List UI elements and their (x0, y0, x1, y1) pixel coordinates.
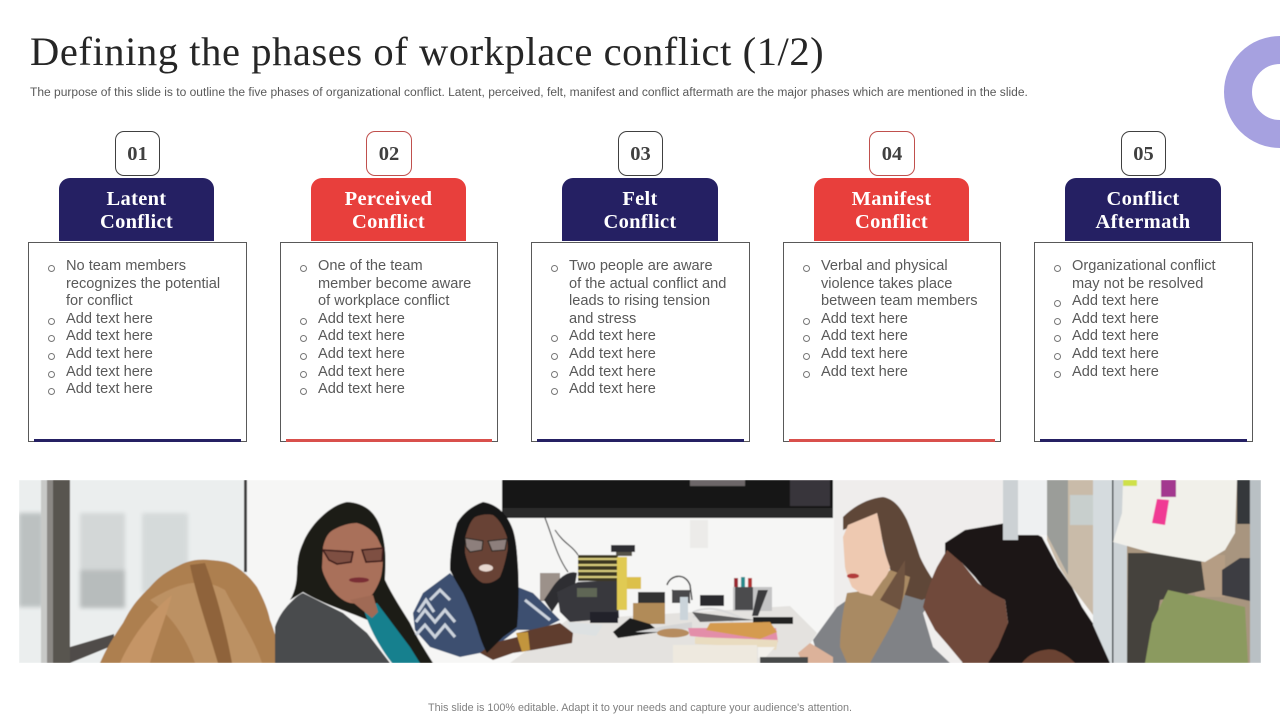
bullet list: manifest: Add text here (821, 311, 908, 327)
woman 5 face (923, 550, 1008, 663)
wall (246, 480, 1092, 663)
bullet list: felt: Two people are aware (569, 258, 713, 274)
bullet list: latent: for conflict (66, 293, 133, 309)
bullet list: aftermath: Add text here (1072, 364, 1159, 380)
bullet list: felt: Add text here (569, 381, 656, 397)
bullet list: manifest: Verbal and physical (821, 258, 948, 274)
bullet list: felt (551, 258, 726, 397)
woman 3 neck (478, 578, 496, 608)
bullet list: felt: and stress (569, 311, 636, 327)
bullet list: felt: leads to rising tension (569, 293, 710, 309)
woman 3 glasses (465, 538, 507, 552)
woman 2 glasses (323, 548, 383, 564)
bullet list: perceived: member become aware (318, 276, 471, 292)
bullet list: aftermath: Organizational conflict (1072, 258, 1216, 274)
woman 2 lips (349, 577, 369, 583)
bullet list: aftermath: Add text here (1072, 311, 1159, 327)
header: Latent Conflict (59, 178, 214, 241)
header: Conflict Aftermath (1065, 178, 1221, 241)
bullet list: manifest: Add text here (821, 364, 908, 380)
header: Felt Conflict: Felt (622, 188, 658, 210)
bullet list: perceived: Add text here (318, 328, 405, 344)
header: Conflict Aftermath: Conflict (1106, 188, 1180, 210)
header: Felt Conflict: Conflict (604, 211, 676, 233)
bullet list: perceived: Add text here (318, 311, 405, 327)
bullet list: perceived: Add text here (318, 381, 405, 397)
number badge 02: 02 (379, 143, 399, 165)
woman 5 shoulder (1022, 650, 1075, 663)
number badge 01 (115, 131, 160, 176)
desk phone and gear (540, 573, 560, 601)
window left (19, 480, 247, 663)
subtitle description: The purpose of this slide is to outline the five phases of organizational conflict. Latent, perceived, felt, manifest and conflict aftermath are the major phases which are mentioned in the slide. (30, 85, 1028, 99)
accent bar: navy (1040, 439, 1247, 442)
header: Manifest Conflict: Conflict (855, 211, 928, 233)
bullet list: manifest: between team members (821, 293, 978, 309)
woman 4 jacket (813, 590, 950, 663)
woman 4 face (843, 513, 890, 596)
woman 1 back of head (100, 560, 282, 663)
green chair (1145, 590, 1248, 663)
bullet list: aftermath: Add text here (1072, 328, 1159, 344)
bullet list: felt: Add text here (569, 346, 656, 362)
bullet list: perceived: One of the team (318, 258, 423, 274)
panel: Latent Conflict (28, 242, 247, 442)
bullet list: felt: Add text here (569, 328, 656, 344)
header: Latent Conflict: Latent (107, 188, 166, 210)
number badge 02 (366, 131, 412, 176)
books (688, 628, 778, 642)
photo illustration: five women in a meeting (19, 480, 1261, 663)
bullet list: aftermath (1054, 258, 1216, 380)
bullet list: manifest (803, 258, 978, 380)
footer note: This slide is 100% editable. Adapt it to your needs and capture your audience's attention. (428, 702, 852, 714)
bullet list: aftermath: Add text here (1072, 293, 1159, 309)
woman 4 hand (798, 643, 833, 663)
accent bar: red (789, 439, 995, 442)
woman 2 face (322, 523, 383, 604)
bullet list: latent (48, 258, 220, 397)
bullet list: latent: Add text here (66, 328, 153, 344)
header: Manifest Conflict (814, 178, 969, 241)
woman 3 hair (450, 502, 519, 653)
bullet list: latent: Add text here (66, 364, 153, 380)
header: Felt Conflict (562, 178, 718, 241)
header: Perceived Conflict: Conflict (352, 211, 425, 233)
header: Manifest Conflict: Manifest (852, 188, 931, 210)
panel: Felt Conflict (531, 242, 750, 442)
right glass panels (1003, 480, 1018, 540)
accent bar: red (286, 439, 492, 442)
number badge 03: 03 (630, 143, 651, 165)
bullet list: latent: Add text here (66, 346, 153, 362)
header: Conflict Aftermath: Aftermath (1096, 211, 1190, 233)
header: Latent Conflict: Conflict (100, 211, 173, 233)
woman 4 hair (843, 497, 937, 600)
bullet list: felt: of the actual conflict and (569, 276, 726, 292)
paper with sticky notes (1113, 480, 1237, 562)
bullet list: latent: recognizes the potential (66, 276, 220, 292)
bullet list: latent: Add text here (66, 381, 153, 397)
woman 4 lips (847, 574, 859, 578)
bullet list: felt: Add text here (569, 364, 656, 380)
woman 2 jacket (275, 593, 390, 663)
panel: Perceived Conflict (280, 242, 498, 442)
header: Perceived Conflict: Perceived (345, 188, 432, 210)
accent bar: navy (537, 439, 744, 442)
bullet list: perceived: of workplace conflict (318, 293, 449, 309)
bullet list: manifest: Add text here (821, 346, 908, 362)
bullet list: perceived: Add text here (318, 364, 405, 380)
tv (502, 480, 833, 518)
woman 2 scarf (363, 603, 420, 663)
number badge 05: 05 (1133, 143, 1154, 165)
number badge 05 (1121, 131, 1166, 176)
bullet list: aftermath: may not be resolved (1072, 276, 1203, 292)
table (510, 606, 817, 663)
title: Defining the phases of workplace conflict (1/2) (30, 29, 824, 74)
number badge 04: 04 (882, 143, 902, 165)
bullet list: latent: Add text here (66, 311, 153, 327)
panel: Manifest Conflict (783, 242, 1001, 442)
accent bar: navy (34, 439, 241, 442)
bullet list: perceived: Add text here (318, 346, 405, 362)
woman 3 smile (479, 564, 493, 572)
header: Perceived Conflict (311, 178, 466, 241)
woman 3 face (465, 514, 508, 583)
number badge 01: 01 (127, 143, 148, 165)
bullet list: latent: No team members (66, 258, 186, 274)
number badge 03 (618, 131, 663, 176)
woman 4 lower hair (840, 570, 910, 663)
bullet list: aftermath: Add text here (1072, 346, 1159, 362)
number badge 04 (869, 131, 915, 176)
bullet list: perceived (300, 258, 471, 397)
panel: Conflict Aftermath (1034, 242, 1253, 442)
woman 5 hair (945, 522, 1112, 663)
bullet list: manifest: violence takes place (821, 276, 952, 292)
woman 3 arm (480, 623, 573, 660)
woman 3 top (413, 573, 560, 657)
woman 2 hair (290, 502, 433, 663)
bullet list: manifest: Add text here (821, 328, 908, 344)
decorative ring: lavender donut (1224, 36, 1280, 148)
